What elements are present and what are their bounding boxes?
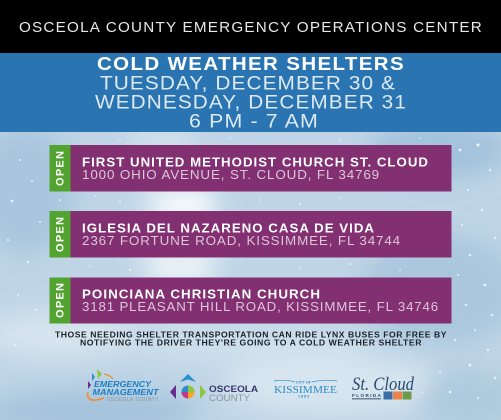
date line 2: WEDNESDAY, DECEMBER 31: [95, 92, 407, 114]
logo: emergency management: [88, 369, 160, 403]
logo: osceola county: [170, 374, 258, 404]
shelter name: POINCIANA CHRISTIAN CHURCH: [82, 287, 321, 302]
logo: st. cloud florida: FLORIDA: [352, 393, 382, 398]
heading: cold weather shelters: COLD WEATHER SHELTERS: [97, 54, 405, 74]
open tag: [50, 145, 70, 192]
panel: shelter 3: [50, 278, 452, 324]
background: icy photo: [0, 120, 501, 420]
date line 1: TUESDAY, DECEMBER 30 &: [100, 74, 396, 94]
transportation note: THOSE NEEDING SHELTER TRANSPORTATION CAN RIDE LYNX BUSES FOR FREE BY: [55, 331, 447, 340]
logo: osceola county: COUNTY: [209, 393, 251, 404]
header bar: black: [0, 0, 501, 53]
open tag: OPEN: [54, 151, 66, 186]
header title: OSCEOLA COUNTY EMERGENCY OPERATIONS CENTER: [19, 19, 483, 36]
shelter address: 1000 OHIO AVENUE, ST. CLOUD, FL 34769: [82, 168, 380, 182]
open tag: [50, 211, 70, 258]
logo: emergency management: MANAGEMENT: [92, 388, 160, 397]
transportation note: [55, 331, 447, 348]
shelter name: IGLESIA DEL NAZARENO CASA DE VIDA: [82, 221, 375, 236]
shelter address: 3181 PLEASANT HILL ROAD, KISSIMMEE, FL 34746: [82, 300, 439, 314]
logo: osceola county: OSCEOLA: [209, 384, 258, 395]
logo: st. cloud florida: St. Cloud: [352, 374, 414, 395]
transportation note: NOTIFYING THE DRIVER THEY'RE GOING TO A COLD WEATHER SHELTER: [80, 339, 422, 348]
logo: emergency management: EMERGENCY: [94, 380, 152, 389]
shelter address: 2367 FORTUNE ROAD, KISSIMMEE, FL 34744: [82, 234, 401, 248]
shelter name: FIRST UNITED METHODIST CHURCH ST. CLOUD: [82, 154, 429, 170]
logo: city of kissimmee: KISSIMMEE: [274, 384, 337, 396]
logo: city of kissimmee: 1883: [298, 394, 309, 398]
logo: emergency management: OSCEOLA COUNTY: [106, 397, 159, 403]
logo: city of kissimmee: [274, 380, 337, 398]
title band: blue: [0, 53, 501, 132]
time: 6 PM - 7 AM: [189, 112, 319, 132]
open tag: [50, 278, 70, 324]
logo: city of kissimmee: CITY OF: [296, 380, 312, 384]
panel: shelter 1: [50, 145, 452, 192]
panel: shelter 2: [50, 211, 452, 258]
open tag: OPEN: [54, 283, 66, 318]
open tag: OPEN: [54, 217, 66, 252]
